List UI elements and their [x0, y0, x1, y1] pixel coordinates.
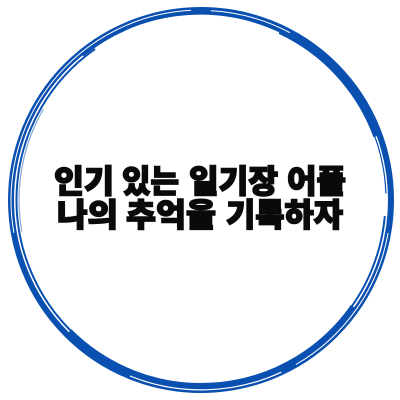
title line 2: 추억을	[126, 197, 216, 233]
title line 1	[54, 164, 346, 200]
title line 2: 나의	[57, 197, 118, 233]
title line 1: 일기장	[189, 164, 278, 200]
title line 1: 인기	[54, 164, 114, 200]
title line 1: 어플	[287, 164, 346, 200]
title	[54, 164, 346, 233]
title line 2	[57, 197, 343, 233]
title line 1: 있는	[122, 164, 179, 200]
title line 2: 기록하자	[226, 197, 343, 233]
